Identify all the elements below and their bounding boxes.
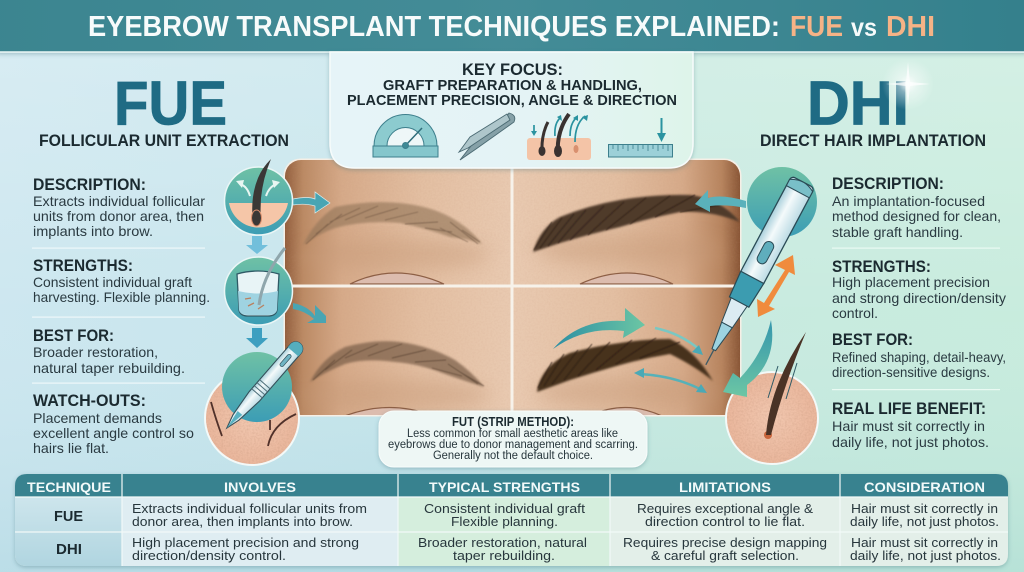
table header: LIMITATIONS: [679, 479, 771, 495]
table row: DHI: High placement precision and strong: [132, 535, 359, 550]
icon: follicle extraction circle: [224, 159, 292, 235]
DHI heading: DIRECT HAIR IMPLANTATION: [760, 132, 986, 150]
watch-outs: WATCH-OUTS:: [33, 392, 146, 410]
eyelid: top left: [350, 273, 444, 284]
arrow: brow direction large: [553, 308, 645, 349]
arrow: curve to DHI skin circle: [723, 320, 772, 397]
table header: CONSIDERATION: [864, 479, 985, 495]
table row: DHI: Hair must sit correctly in: [851, 535, 998, 550]
strengths: [33, 257, 210, 305]
arrow: down to storage: [246, 236, 268, 254]
watch-outs: hairs lie flat.: [33, 440, 109, 456]
table row: FUE: Consistent individual graft: [424, 501, 585, 516]
callout: FUT strip method: [379, 411, 647, 467]
real life benefit: REAL LIFE BENEFIT:: [832, 400, 986, 418]
strengths: High placement precision: [832, 274, 990, 290]
icon: hair direction: [527, 114, 591, 160]
table row: FUE: FUE: [54, 509, 83, 525]
table row: FUE: Extracts individual follicular units from: [132, 501, 367, 516]
best for: Refined shaping, detail-heavy,: [832, 349, 1006, 365]
best for: BEST FOR:: [33, 327, 114, 345]
real life benefit: [832, 400, 989, 450]
FUE heading: [39, 68, 289, 150]
description: method designed for clean,: [832, 208, 1001, 224]
strengths: [832, 258, 1006, 321]
description: An implantation-focused: [832, 193, 985, 209]
brow: FUE top: [303, 202, 482, 245]
table row: FUE: Hair must sit correctly in: [851, 501, 998, 516]
key focus text: [347, 60, 677, 109]
title banner: FUE: [790, 11, 843, 43]
table row: DHI: taper rebuilding.: [453, 548, 555, 563]
best for: [33, 327, 185, 376]
eyelid: bottom right: [602, 406, 661, 415]
table row: DHI: [56, 535, 1001, 563]
table row: DHI: direction/density control.: [132, 548, 286, 563]
callout: FUT strip method: Less common for small aesthetic areas like: [407, 428, 618, 440]
table row: DHI: daily life, not just photos.: [850, 548, 1001, 563]
icon: tweezers: [459, 113, 515, 160]
eyelid: bottom left: [346, 406, 418, 415]
DHI details: [832, 175, 1006, 450]
description: DESCRIPTION:: [832, 175, 944, 193]
FUE heading: FOLLICULAR UNIT EXTRACTION: [39, 132, 289, 150]
table row: FUE: donor area, then implants into brow.: [132, 514, 353, 529]
FUE heading: FUE: [114, 68, 227, 138]
arrow: brow double arrow: [634, 368, 707, 393]
key focus text: GRAFT PREPARATION & HANDLING,: [383, 77, 642, 94]
DHI heading: [760, 58, 986, 150]
title banner: EYEBROW TRANSPLANT TECHNIQUES EXPLAINED:: [88, 11, 780, 43]
icon: graft storage glass: [224, 248, 292, 325]
best for: direction-sensitive designs.: [832, 364, 990, 380]
table header: [27, 479, 985, 495]
arrow: orange double arrow: [757, 255, 795, 317]
table row: FUE: Flexible planning.: [451, 514, 558, 529]
watch-outs: [33, 392, 194, 456]
arrowhead: brow direction small: [692, 345, 703, 355]
arrow: to FUE lower photo: [293, 303, 326, 323]
table row: FUE: Requires exceptional angle &: [637, 501, 813, 516]
table row: DHI: Requires precise design mapping: [623, 535, 827, 550]
strengths: harvesting. Flexible planning.: [33, 289, 210, 305]
arrow: down to implanter: [246, 328, 268, 348]
panel: key focus: [330, 52, 693, 168]
title banner: DHI: [886, 11, 935, 43]
callout: FUT strip method: eyebrows due to donor management and scarring.: [388, 439, 638, 451]
description: [33, 176, 205, 239]
table row: FUE: daily life, not just photos.: [850, 514, 999, 529]
table row: FUE: direction control to lie flat.: [645, 514, 805, 529]
arrow: to FUE top photo: [293, 192, 330, 213]
strengths: control.: [832, 305, 878, 321]
title banner: [0, 0, 1024, 52]
table header: TYPICAL STRENGTHS: [429, 479, 580, 495]
icon: ruler: [608, 118, 672, 157]
description: units from donor area, then: [33, 208, 204, 224]
key focus text: KEY FOCUS:: [462, 60, 563, 79]
description: implants into brow.: [33, 223, 153, 239]
table body: [15, 474, 1008, 566]
real life benefit: daily life, not just photos.: [832, 434, 989, 450]
key focus text: PLACEMENT PRECISION, ANGLE & DIRECTION: [347, 92, 677, 109]
table header: INVOLVES: [224, 479, 296, 495]
icon: DHI circle: [747, 167, 817, 237]
strengths: STRENGTHS:: [33, 257, 133, 275]
table row: FUE: [54, 501, 999, 529]
watch-outs: Placement demands: [33, 410, 162, 426]
table row: DHI: Broader restoration, natural: [418, 535, 587, 550]
title banner: vs: [851, 14, 877, 42]
callout: FUT strip method: FUT (STRIP METHOD):: [452, 414, 574, 429]
brow: DHI top: [533, 195, 740, 252]
DHI heading: DHI: [807, 68, 909, 138]
best for: natural taper rebuilding.: [33, 360, 185, 376]
eyelid: top right: [580, 273, 673, 284]
brow: DHI bottom: [537, 338, 713, 392]
best for: Broader restoration,: [33, 344, 158, 360]
table row: DHI: & careful graft selection.: [651, 548, 799, 563]
best for: BEST FOR:: [832, 331, 913, 349]
strengths: STRENGTHS:: [832, 258, 931, 276]
strengths: Consistent individual graft: [33, 274, 192, 290]
arrow: DHI top photo: [695, 190, 746, 212]
eyebrow photo panel: [284, 158, 742, 417]
icon: DHI skin circle with hair: [725, 332, 819, 465]
description: stable graft handling.: [832, 224, 963, 240]
brow: FUE bottom: [310, 341, 484, 387]
arrow: brow direction small: [655, 328, 700, 350]
best for: [832, 331, 1006, 380]
real life benefit: Hair must sit correctly in: [832, 418, 985, 434]
FUE details: [32, 176, 210, 456]
description: [832, 175, 1001, 240]
description: DESCRIPTION:: [33, 176, 146, 194]
table row: DHI: DHI: [56, 542, 82, 558]
description: Extracts individual follicular: [33, 193, 205, 209]
icon: DHI implanter pen: [694, 176, 814, 371]
icon: FUE skin circle with implanter: [205, 339, 306, 465]
icon: protractor: [373, 115, 438, 157]
table header: TECHNIQUE: [27, 479, 111, 495]
strengths: and strong direction/density: [832, 290, 1006, 306]
callout: FUT strip method: Generally not the default choice.: [433, 450, 593, 462]
comparison table: [15, 474, 1008, 566]
watch-outs: excellent angle control so: [33, 425, 194, 441]
